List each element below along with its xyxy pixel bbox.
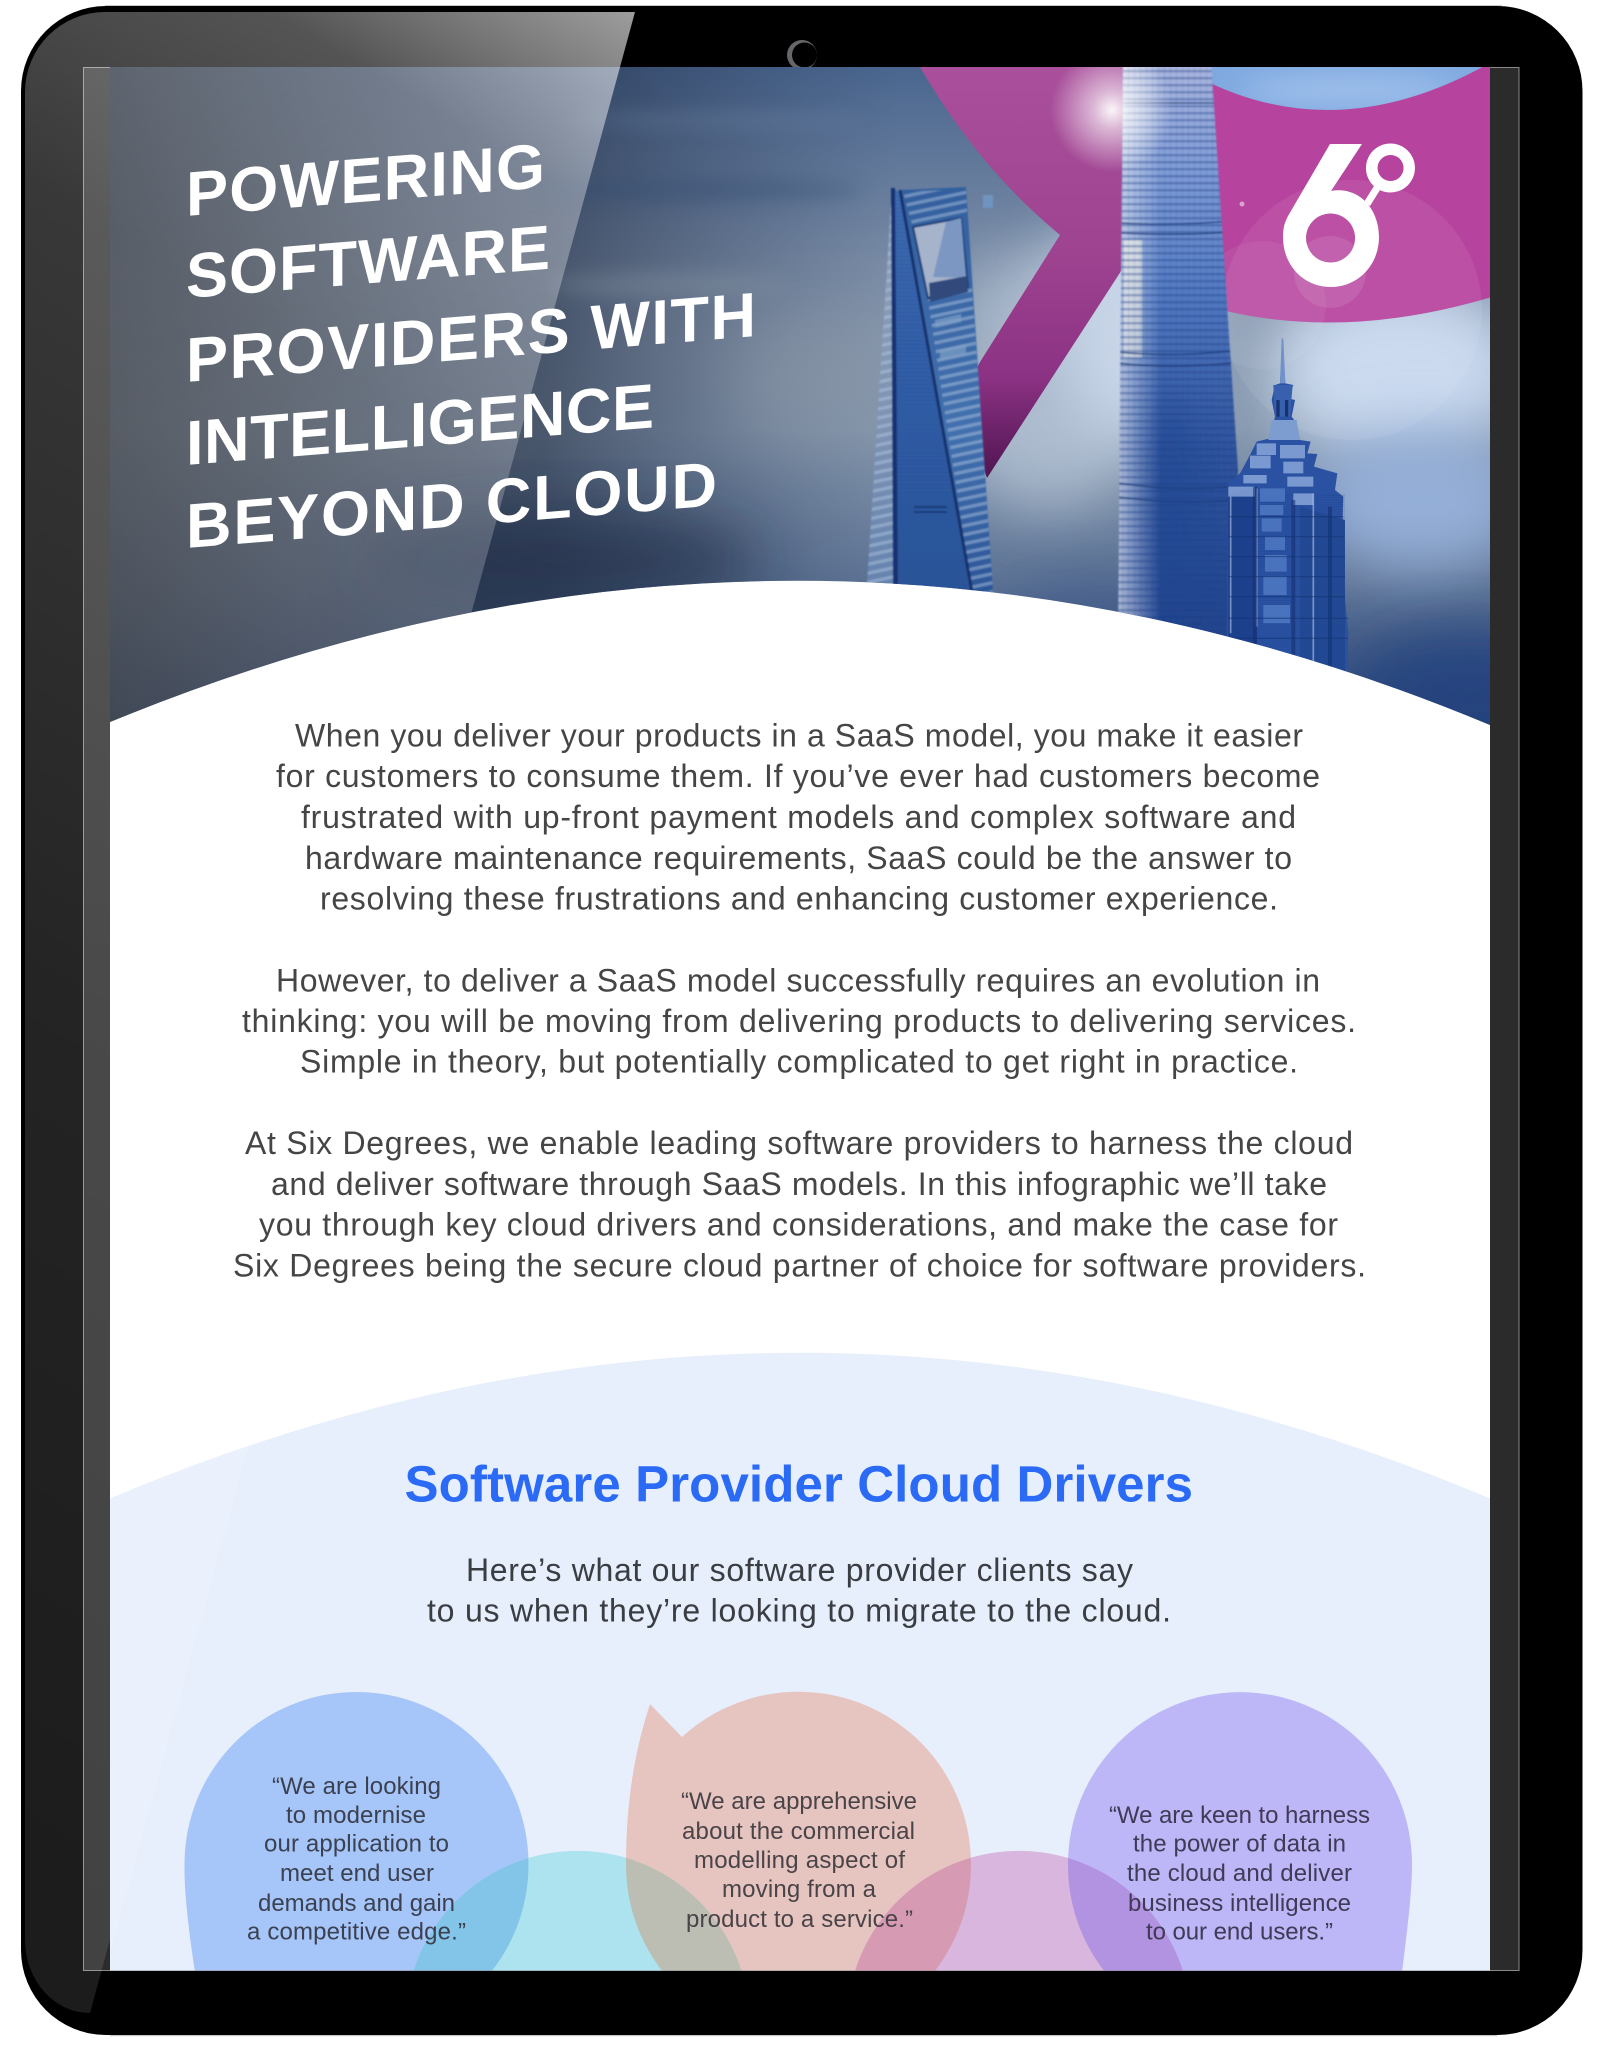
quote: business intelligence: the power of data in xyxy=(1133,1830,1346,1858)
paragraph 2: thinking: you will be moving from delivering products to delivering services. xyxy=(242,1003,1356,1039)
quote: modernise: demands and gain xyxy=(258,1890,455,1917)
screen content xyxy=(110,67,1490,1970)
paragraph 3: Six Degrees being the secure cloud partner of choice for software providers. xyxy=(233,1248,1366,1284)
paragraph 1: hardware maintenance requirements, SaaS could be the answer to xyxy=(305,840,1292,876)
quote: commercial modelling: modelling aspect of xyxy=(694,1847,905,1874)
quote: commercial modelling xyxy=(681,1788,917,1933)
quote: commercial modelling: “We are apprehensive xyxy=(681,1788,917,1815)
tower: World Financial Center xyxy=(867,187,993,592)
logo: 6 degrees xyxy=(1283,143,1415,287)
quote: modernise: to modernise xyxy=(286,1802,426,1829)
title line 5: BEYOND CLOUD xyxy=(186,449,717,562)
quote: modernise: our application to xyxy=(264,1830,449,1858)
tower: Jin Mao xyxy=(1227,338,1348,673)
quote: modernise: meet end user xyxy=(280,1860,434,1887)
subheading: to us when they’re looking to migrate to the cloud. xyxy=(427,1592,1171,1628)
quote: business intelligence: the cloud and deliver xyxy=(1127,1860,1352,1887)
camera xyxy=(787,40,817,70)
paragraph 3: At Six Degrees, we enable leading software providers to harness the cloud xyxy=(245,1125,1353,1161)
quote: modernise: a competitive edge.” xyxy=(247,1918,466,1946)
quote: modernise: “We are looking xyxy=(272,1773,441,1800)
quote: modernise xyxy=(247,1773,466,1946)
speech bubble: pink xyxy=(626,1692,971,1972)
light blue section background xyxy=(110,1353,1490,1970)
paragraph 1: for customers to consume them. If you’ve ever had customers become xyxy=(276,758,1320,794)
magenta band xyxy=(1212,67,1490,369)
title line 4: INTELLIGENCE xyxy=(186,371,654,479)
hero title xyxy=(186,131,756,562)
paragraph 2: However, to deliver a SaaS model successfully requires an evolution in xyxy=(276,962,1320,998)
paragraph 1: When you deliver your products in a SaaS model, you make it easier xyxy=(295,718,1303,754)
paragraph 1: resolving these frustrations and enhancing customer experience. xyxy=(320,880,1278,916)
speech bubble: blue xyxy=(184,1692,529,1972)
tower: Shanghai Tower xyxy=(1118,60,1240,640)
heading: Software Provider Cloud Drivers xyxy=(404,1456,1193,1512)
title line 3: PROVIDERS WITH xyxy=(186,280,756,396)
title line 2: SOFTWARE xyxy=(186,213,550,312)
quote: business intelligence: “We are keen to harness xyxy=(1109,1802,1370,1829)
paragraph 3: and deliver software through SaaS models. In this infographic we’ll take xyxy=(271,1166,1327,1202)
section glare xyxy=(110,1430,253,1955)
paragraph 2: Simple in theory, but potentially complicated to get right in practice. xyxy=(300,1044,1298,1080)
quote: commercial modelling: product to a service.” xyxy=(686,1906,913,1933)
lens flare xyxy=(1054,67,1170,168)
speech bubble: teal xyxy=(413,1851,742,1972)
paragraph 1: frustrated with up-front payment models and complex software and xyxy=(301,799,1296,835)
quote: business intelligence xyxy=(1109,1802,1370,1946)
quote: business intelligence: business intelligence xyxy=(1128,1890,1351,1917)
subheading: Here’s what our software provider clients say xyxy=(466,1552,1133,1588)
subheading xyxy=(427,1552,1171,1628)
sky background xyxy=(110,67,1490,725)
title line 1: POWERING xyxy=(186,131,545,230)
magenta chevron shape xyxy=(920,67,1124,478)
paragraph 3 xyxy=(233,1125,1366,1284)
panel: cloud drivers xyxy=(110,1353,1490,1972)
intro text xyxy=(233,718,1366,1284)
paragraph 1 xyxy=(276,718,1320,916)
quote: business intelligence: to our end users.” xyxy=(1146,1918,1333,1946)
paragraph 2 xyxy=(242,962,1356,1080)
quote: commercial modelling: moving from a xyxy=(722,1876,877,1903)
hero image xyxy=(110,67,1490,725)
hero glare xyxy=(110,67,620,722)
quote: commercial modelling: about the commercial xyxy=(682,1818,915,1845)
speech bubble: mauve xyxy=(855,1851,1183,1972)
speech bubble: purple xyxy=(1068,1692,1412,1972)
frame glare xyxy=(25,12,635,2013)
paragraph 3: you through key cloud drivers and considerations, and make the case for xyxy=(259,1206,1338,1242)
